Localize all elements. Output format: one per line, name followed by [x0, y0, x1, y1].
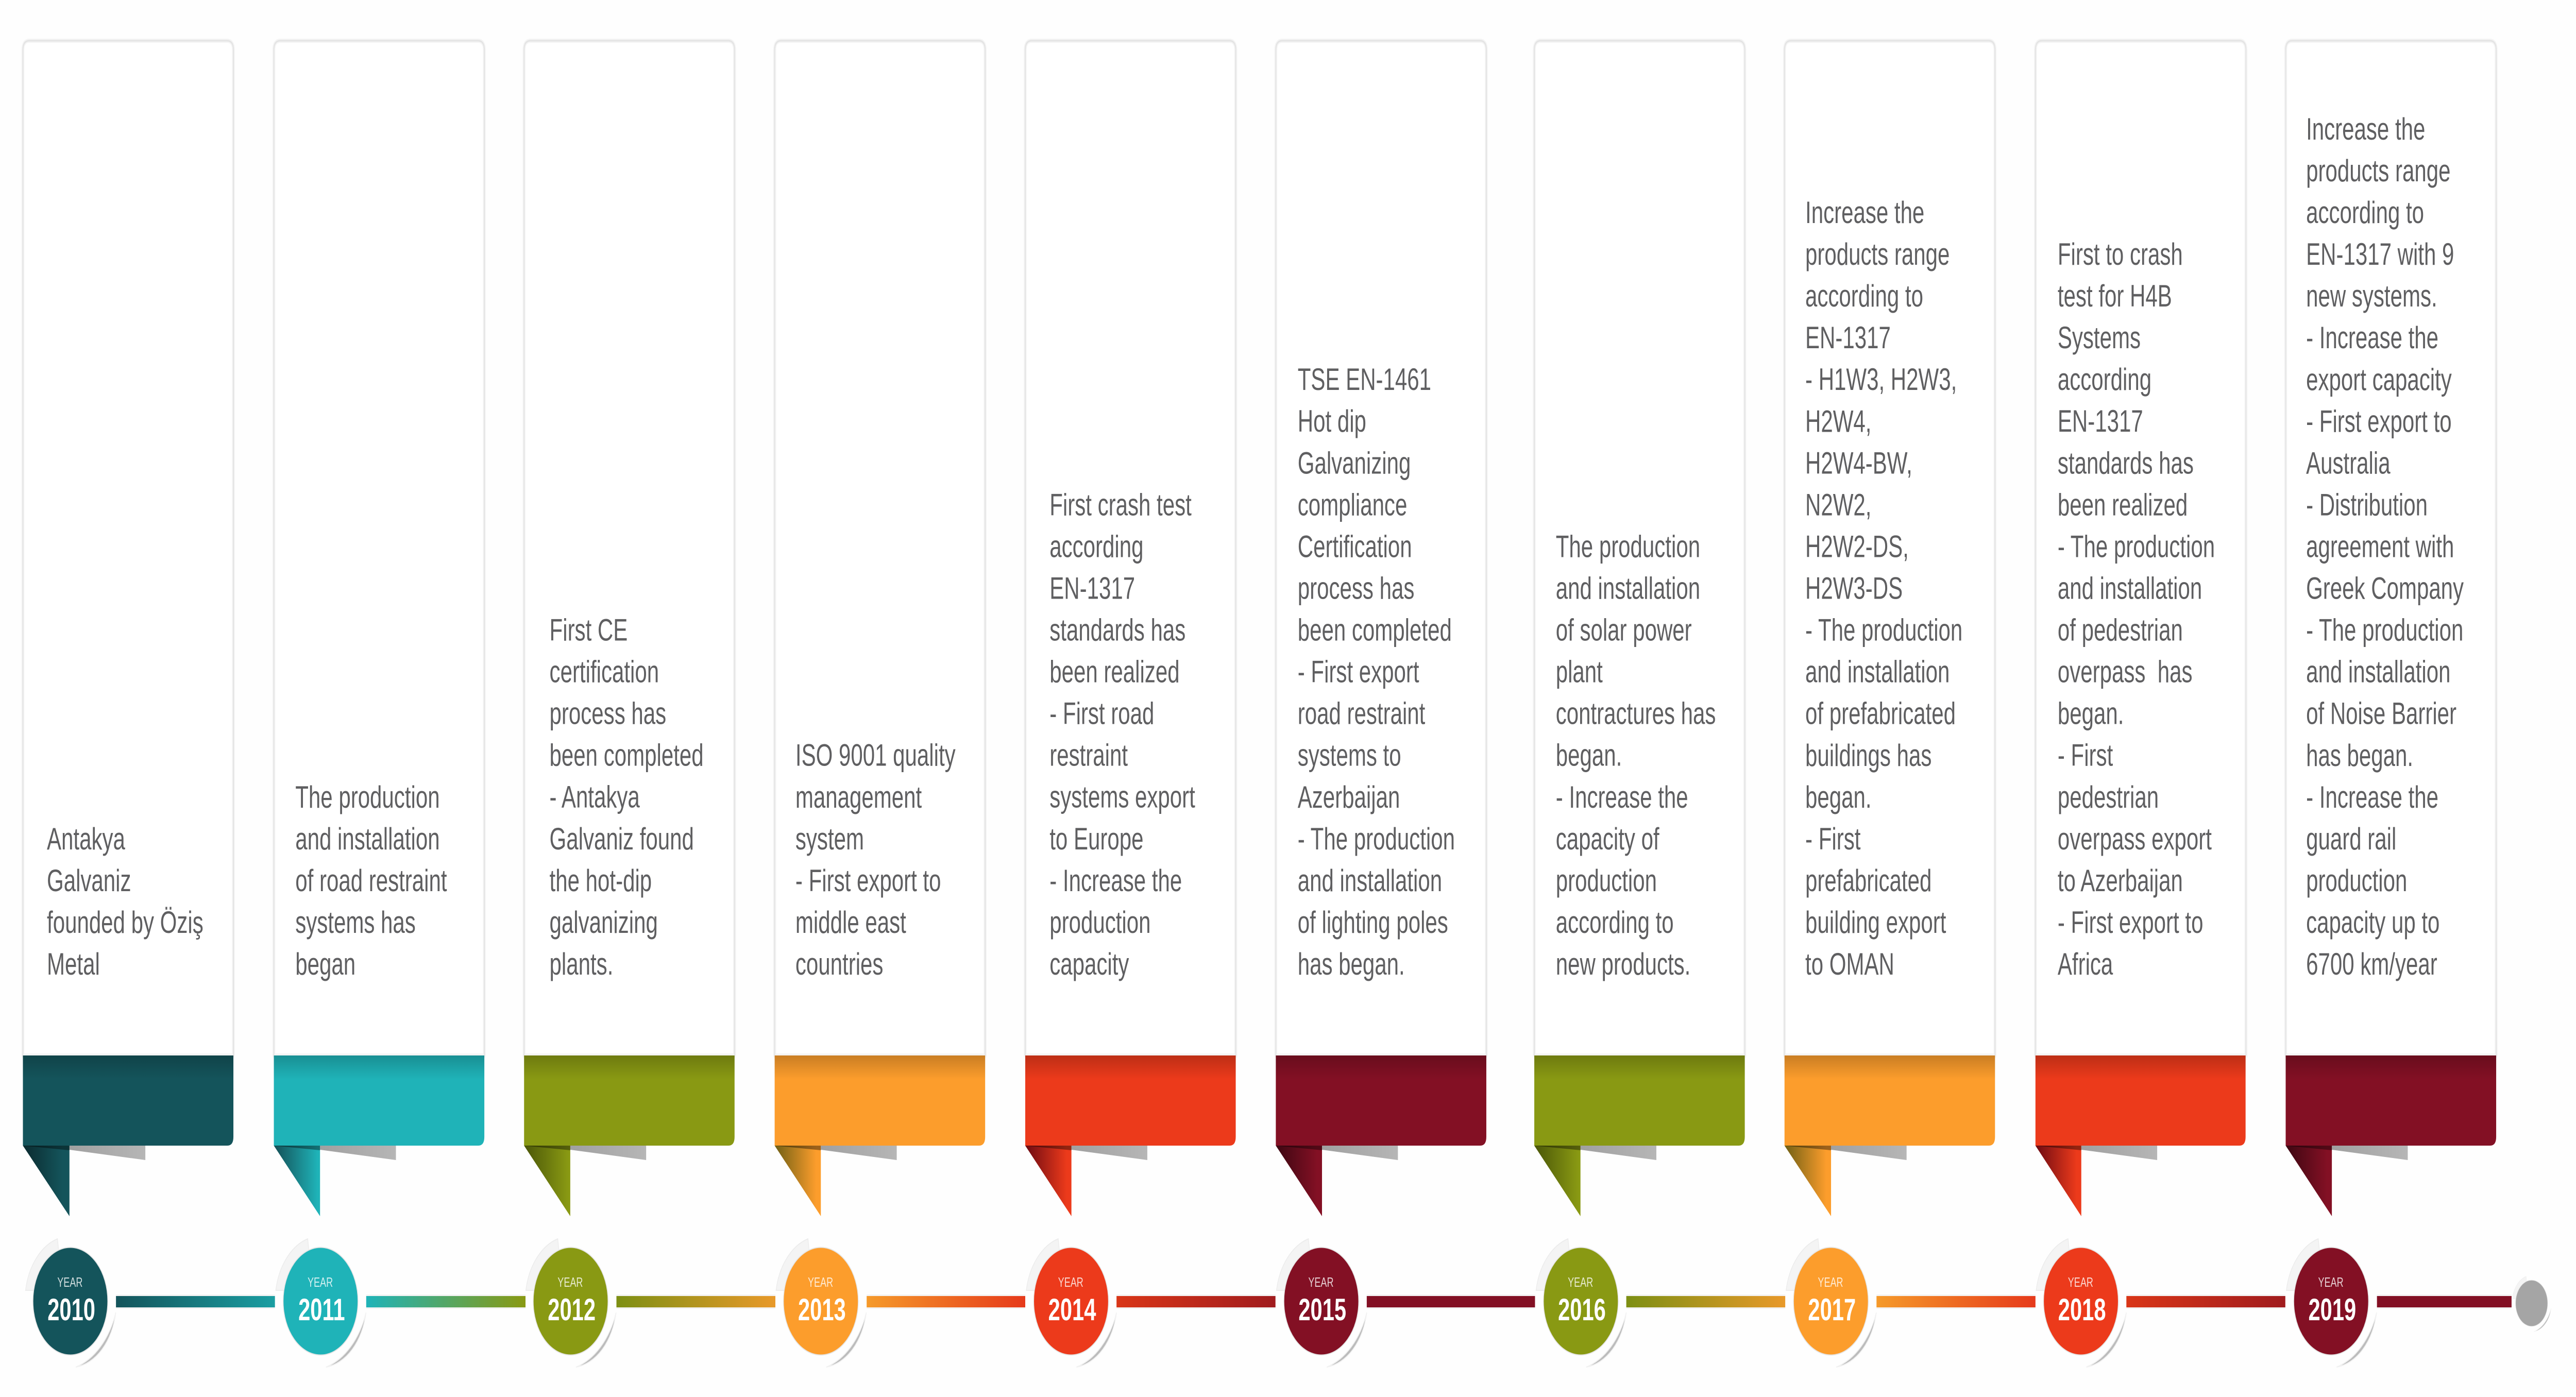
- ribbon: 2013 banner: [775, 1055, 985, 1216]
- text: 2012 description: plants.: [550, 947, 613, 982]
- text: 2019 description: EN-1317 with 9: [2306, 237, 2454, 272]
- text: 2014 description: to Europe: [1049, 822, 1143, 857]
- panel: 2015 card: [1276, 41, 1486, 1216]
- text: 2017 description: according to: [1805, 279, 1923, 314]
- text: 2018 description: EN-1317: [2058, 404, 2143, 439]
- milestone 2012: [524, 41, 775, 1367]
- ribbon: 2012 banner: [524, 1055, 735, 1216]
- badge: year 2013: [776, 1239, 866, 1367]
- text: 2016 description: and installation: [1556, 571, 1700, 606]
- badge: year 2015: [1277, 1239, 1367, 1367]
- text: 2015 description: TSE EN-1461: [1298, 363, 1431, 397]
- badge: year 2010: [26, 1239, 116, 1367]
- text: 2013 description: ISO 9001 quality: [795, 738, 956, 773]
- badge: year 2011: [276, 1239, 366, 1367]
- text: 2012 description: galvanizing: [550, 905, 658, 940]
- text: 2011 description: systems has: [295, 906, 416, 940]
- text: 2014 description: standards has: [1049, 613, 1185, 648]
- text: 2018 description: - First: [2058, 738, 2113, 773]
- text: 2010 description: Galvaniz: [47, 863, 131, 898]
- text: 2017 description: H2W4-BW,: [1805, 446, 1912, 481]
- text: 2014 description: according: [1049, 530, 1143, 564]
- end marker: grey dot: [2512, 1276, 2551, 1332]
- text: 2017 description: - First: [1805, 822, 1861, 857]
- text: 2017 description: prefabricated: [1805, 864, 1931, 898]
- badge: year 2016: [1536, 1239, 1626, 1367]
- milestone 2014: [1025, 41, 1276, 1367]
- badge: year 2012: 2012: [548, 1292, 596, 1327]
- milestone 2019: [2285, 41, 2512, 1367]
- text: 2015 description: has began.: [1298, 947, 1405, 982]
- text: 2010 description: founded by Öziş: [47, 905, 204, 940]
- ribbon: 2018 banner: [2036, 1055, 2246, 1216]
- text: 2015 description: and installation: [1298, 863, 1442, 898]
- text: 2018 description: and installation: [2058, 571, 2202, 606]
- text: 2016 description: The production: [1556, 530, 1700, 564]
- milestone 2010: [23, 41, 275, 1367]
- panel: 2013 card: [775, 41, 985, 1216]
- text: 2017 description: H2W2-DS,: [1805, 530, 1909, 564]
- badge: year 2013: 2013: [798, 1292, 846, 1327]
- badge: year 2014: 2014: [1048, 1292, 1096, 1327]
- text: 2019 description: new systems.: [2306, 279, 2437, 314]
- badge: year 2014: YEAR: [1058, 1275, 1083, 1290]
- ribbon: 2015 banner: [1276, 1055, 1486, 1216]
- connector 2010-2011: [116, 1294, 275, 1309]
- text: 2017 description: and installation: [1805, 655, 1950, 690]
- text: 2019 description: 6700 km/year: [2306, 947, 2437, 982]
- text: 2018 description: been realized: [2058, 488, 2188, 522]
- text: 2016 description: contractures has: [1556, 696, 1716, 731]
- badge: year 2019: YEAR: [2318, 1275, 2344, 1290]
- text: 2014 description: EN-1317: [1049, 571, 1135, 606]
- text: 2017 description: buildings has: [1805, 738, 1931, 773]
- connector 2016-2017: [1626, 1294, 1785, 1309]
- text: 2013 description: countries: [795, 947, 883, 982]
- text: 2017 description: H2W3-DS: [1805, 571, 1903, 606]
- badge: year 2017: [1786, 1239, 1876, 1367]
- text: 2012 description: - Antakya: [550, 780, 640, 815]
- text: 2018 description: Africa: [2058, 947, 2113, 982]
- text: 2013 description: system: [795, 822, 864, 857]
- badge: year 2010: YEAR: [57, 1275, 82, 1290]
- panel: 2011 card: [274, 41, 484, 1216]
- text: 2019 description: - First export to: [2306, 404, 2452, 439]
- badge: year 2017: 2017: [1808, 1292, 1856, 1327]
- badge: year 2018: [2036, 1239, 2126, 1367]
- badge: year 2015: YEAR: [1308, 1275, 1334, 1290]
- text: 2019 description: export capacity: [2306, 363, 2452, 397]
- text: 2014 description: - First road: [1049, 696, 1154, 731]
- milestone 2015: [1276, 41, 1535, 1367]
- text: 2017 description: - H1W3, H2W3,: [1805, 363, 1957, 397]
- text: 2018 description: according: [2058, 363, 2151, 397]
- connector 2014-2015: [1116, 1294, 1276, 1309]
- milestone 2018: [2036, 41, 2285, 1367]
- badge: year 2013: YEAR: [808, 1275, 833, 1290]
- ribbon: 2014 banner: [1025, 1055, 1236, 1216]
- text: 2012 description: been completed: [550, 738, 704, 773]
- text: 2011 description: of road restraint: [295, 863, 447, 898]
- text: 2016 description: production: [1556, 863, 1657, 898]
- text: 2019 description: guard rail: [2306, 822, 2396, 857]
- ribbon: 2011 banner: [274, 1055, 484, 1216]
- badge: year 2017: YEAR: [1818, 1275, 1843, 1290]
- text: 2019 description: capacity up to: [2306, 906, 2439, 940]
- text: 2014 description: First crash test: [1049, 488, 1192, 522]
- text: 2016 description: according to: [1556, 906, 1674, 940]
- text: 2015 description: Azerbaijan: [1298, 780, 1400, 815]
- text: 2015 description: - First export: [1298, 655, 1419, 690]
- text: 2019 description: Australia: [2306, 446, 2391, 481]
- connector 2015-2016: [1367, 1294, 1535, 1309]
- text: 2017 description: building export: [1805, 906, 1946, 940]
- text: 2017 description: - The production: [1805, 613, 1962, 648]
- text: 2015 description: compliance: [1298, 488, 1407, 522]
- panel: 2016 card: [1534, 41, 1745, 1216]
- text: 2014 description: been realized: [1049, 655, 1180, 689]
- badge: year 2014: [1026, 1239, 1116, 1367]
- connector 2011-2012: [366, 1294, 526, 1309]
- text: 2017 description: N2W2,: [1805, 488, 1871, 522]
- text: 2018 description: of pedestrian: [2058, 613, 2183, 648]
- badge: year 2016: 2016: [1558, 1292, 1606, 1327]
- text: 2015 description: of lighting poles: [1298, 906, 1448, 940]
- badge: year 2018: YEAR: [2068, 1275, 2093, 1290]
- text: 2012 description: First CE: [550, 613, 628, 648]
- panel: 2019 card: [2285, 41, 2496, 1216]
- text: 2016 description: began.: [1556, 738, 1622, 773]
- text: 2015 description: - The production: [1298, 822, 1455, 857]
- text: 2011 description: and installation: [295, 822, 440, 857]
- text: 2019 description: - The production: [2306, 613, 2463, 648]
- badge: year 2010: 2010: [47, 1292, 95, 1327]
- text: 2019 description: according to: [2306, 196, 2424, 230]
- milestone 2013: [775, 41, 1025, 1367]
- text: 2014 description: production: [1049, 905, 1150, 940]
- text: 2019 description: agreement with: [2306, 530, 2454, 564]
- text: 2018 description: overpass has: [2058, 655, 2193, 690]
- text: 2019 description: products range: [2306, 154, 2450, 189]
- text: 2019 description: has began.: [2306, 738, 2413, 773]
- text: 2017 description: Increase the: [1805, 196, 1924, 230]
- text: 2017 description: products range: [1805, 237, 1950, 272]
- text: 2014 description: - Increase the: [1049, 863, 1182, 898]
- text: 2013 description: - First export to: [795, 863, 941, 898]
- badge: year 2015: 2015: [1298, 1292, 1346, 1327]
- text: 2016 description: of solar power: [1556, 613, 1692, 648]
- badge: year 2012: [526, 1239, 616, 1367]
- text: 2019 description: of Noise Barrier: [2306, 696, 2456, 731]
- milestone 2016: [1534, 41, 1785, 1367]
- text: 2018 description: to Azerbaijan: [2058, 863, 2183, 898]
- text: 2018 description: overpass export: [2058, 822, 2212, 857]
- text: 2019 description: - Distribution: [2306, 488, 2428, 522]
- text: 2018 description: began.: [2058, 696, 2124, 731]
- text: 2017 description: to OMAN: [1805, 947, 1894, 982]
- text: 2011 description: began: [295, 947, 355, 982]
- text: 2016 description: - Increase the: [1556, 780, 1688, 815]
- ribbon: 2017 banner: [1785, 1055, 1995, 1216]
- text: 2012 description: Galvaniz found: [550, 822, 694, 857]
- text: 2015 description: been completed: [1298, 613, 1452, 648]
- badge: year 2012: YEAR: [557, 1275, 583, 1290]
- milestone 2017: [1785, 41, 2036, 1367]
- text: 2019 description: production: [2306, 864, 2407, 898]
- text: 2018 description: Systems: [2058, 321, 2141, 355]
- connector 2012-2013: [616, 1294, 775, 1309]
- text: 2018 description: First to crash: [2058, 237, 2183, 272]
- text: 2016 description: capacity of: [1556, 822, 1659, 857]
- panel: 2010 card: [23, 41, 233, 1216]
- text: 2017 description: began.: [1805, 780, 1872, 815]
- badge: year 2019: 2019: [2308, 1292, 2356, 1327]
- text: 2016 description: new products.: [1556, 947, 1690, 982]
- text: 2014 description: restraint: [1049, 738, 1128, 773]
- ribbon: 2016 banner: [1534, 1055, 1745, 1216]
- badge: year 2019: [2286, 1239, 2377, 1367]
- text: 2015 description: road restraint: [1298, 696, 1426, 731]
- text: 2019 description: and installation: [2306, 655, 2450, 690]
- panel: 2017 card: [1785, 41, 1995, 1216]
- badge: year 2018: 2018: [2058, 1292, 2106, 1327]
- text: 2019 description: Greek Company: [2306, 571, 2464, 606]
- milestone 2011: [274, 41, 526, 1367]
- text: 2015 description: Galvanizing: [1298, 446, 1411, 481]
- text: 2012 description: certification: [550, 655, 659, 689]
- text: 2019 description: Increase the: [2306, 112, 2425, 147]
- text: 2010 description: Metal: [47, 947, 100, 982]
- text: 2013 description: middle east: [795, 906, 906, 940]
- ribbon: 2010 banner: [23, 1055, 233, 1216]
- text: 2011 description: The production: [295, 780, 440, 815]
- text: 2012 description: process has: [550, 696, 666, 731]
- text: 2018 description: - First export to: [2058, 906, 2203, 940]
- panel: 2014 card: [1025, 41, 1236, 1216]
- text: 2018 description: standards has: [2058, 446, 2194, 481]
- text: 2019 description: - Increase the: [2306, 780, 2438, 815]
- text: 2015 description: process has: [1298, 571, 1414, 606]
- text: 2012 description: the hot-dip: [550, 863, 652, 898]
- connector 2018-2019: [2126, 1294, 2285, 1309]
- text: 2013 description: management: [795, 780, 922, 815]
- text: 2017 description: EN-1317: [1805, 321, 1891, 355]
- badge: year 2016: YEAR: [1568, 1275, 1593, 1290]
- text: 2015 description: Hot dip: [1298, 404, 1366, 439]
- badge: year 2011: YEAR: [308, 1275, 333, 1290]
- connector 2017-2018: [1876, 1294, 2036, 1309]
- text: 2017 description: H2W4,: [1805, 404, 1871, 439]
- ribbon: 2019 banner: [2285, 1055, 2496, 1216]
- text: 2017 description: of prefabricated: [1805, 696, 1956, 731]
- badge: year 2011: 2011: [298, 1292, 345, 1327]
- text: 2016 description: plant: [1556, 655, 1603, 690]
- text: 2015 description: systems to: [1298, 738, 1401, 773]
- text: 2010 description: Antakya: [47, 822, 125, 857]
- text: 2018 description: test for H4B: [2058, 279, 2172, 314]
- panel: 2012 card: [524, 41, 735, 1216]
- panel: 2018 card: [2036, 41, 2246, 1216]
- connector 2019-end: [2377, 1294, 2512, 1309]
- text: 2014 description: capacity: [1049, 947, 1129, 982]
- text: 2014 description: systems export: [1049, 780, 1195, 815]
- text: 2018 description: pedestrian: [2058, 780, 2159, 815]
- text: 2018 description: - The production: [2058, 530, 2215, 564]
- connector 2013-2014: [867, 1294, 1025, 1309]
- text: 2019 description: - Increase the: [2306, 321, 2438, 355]
- text: 2015 description: Certification: [1298, 530, 1412, 564]
